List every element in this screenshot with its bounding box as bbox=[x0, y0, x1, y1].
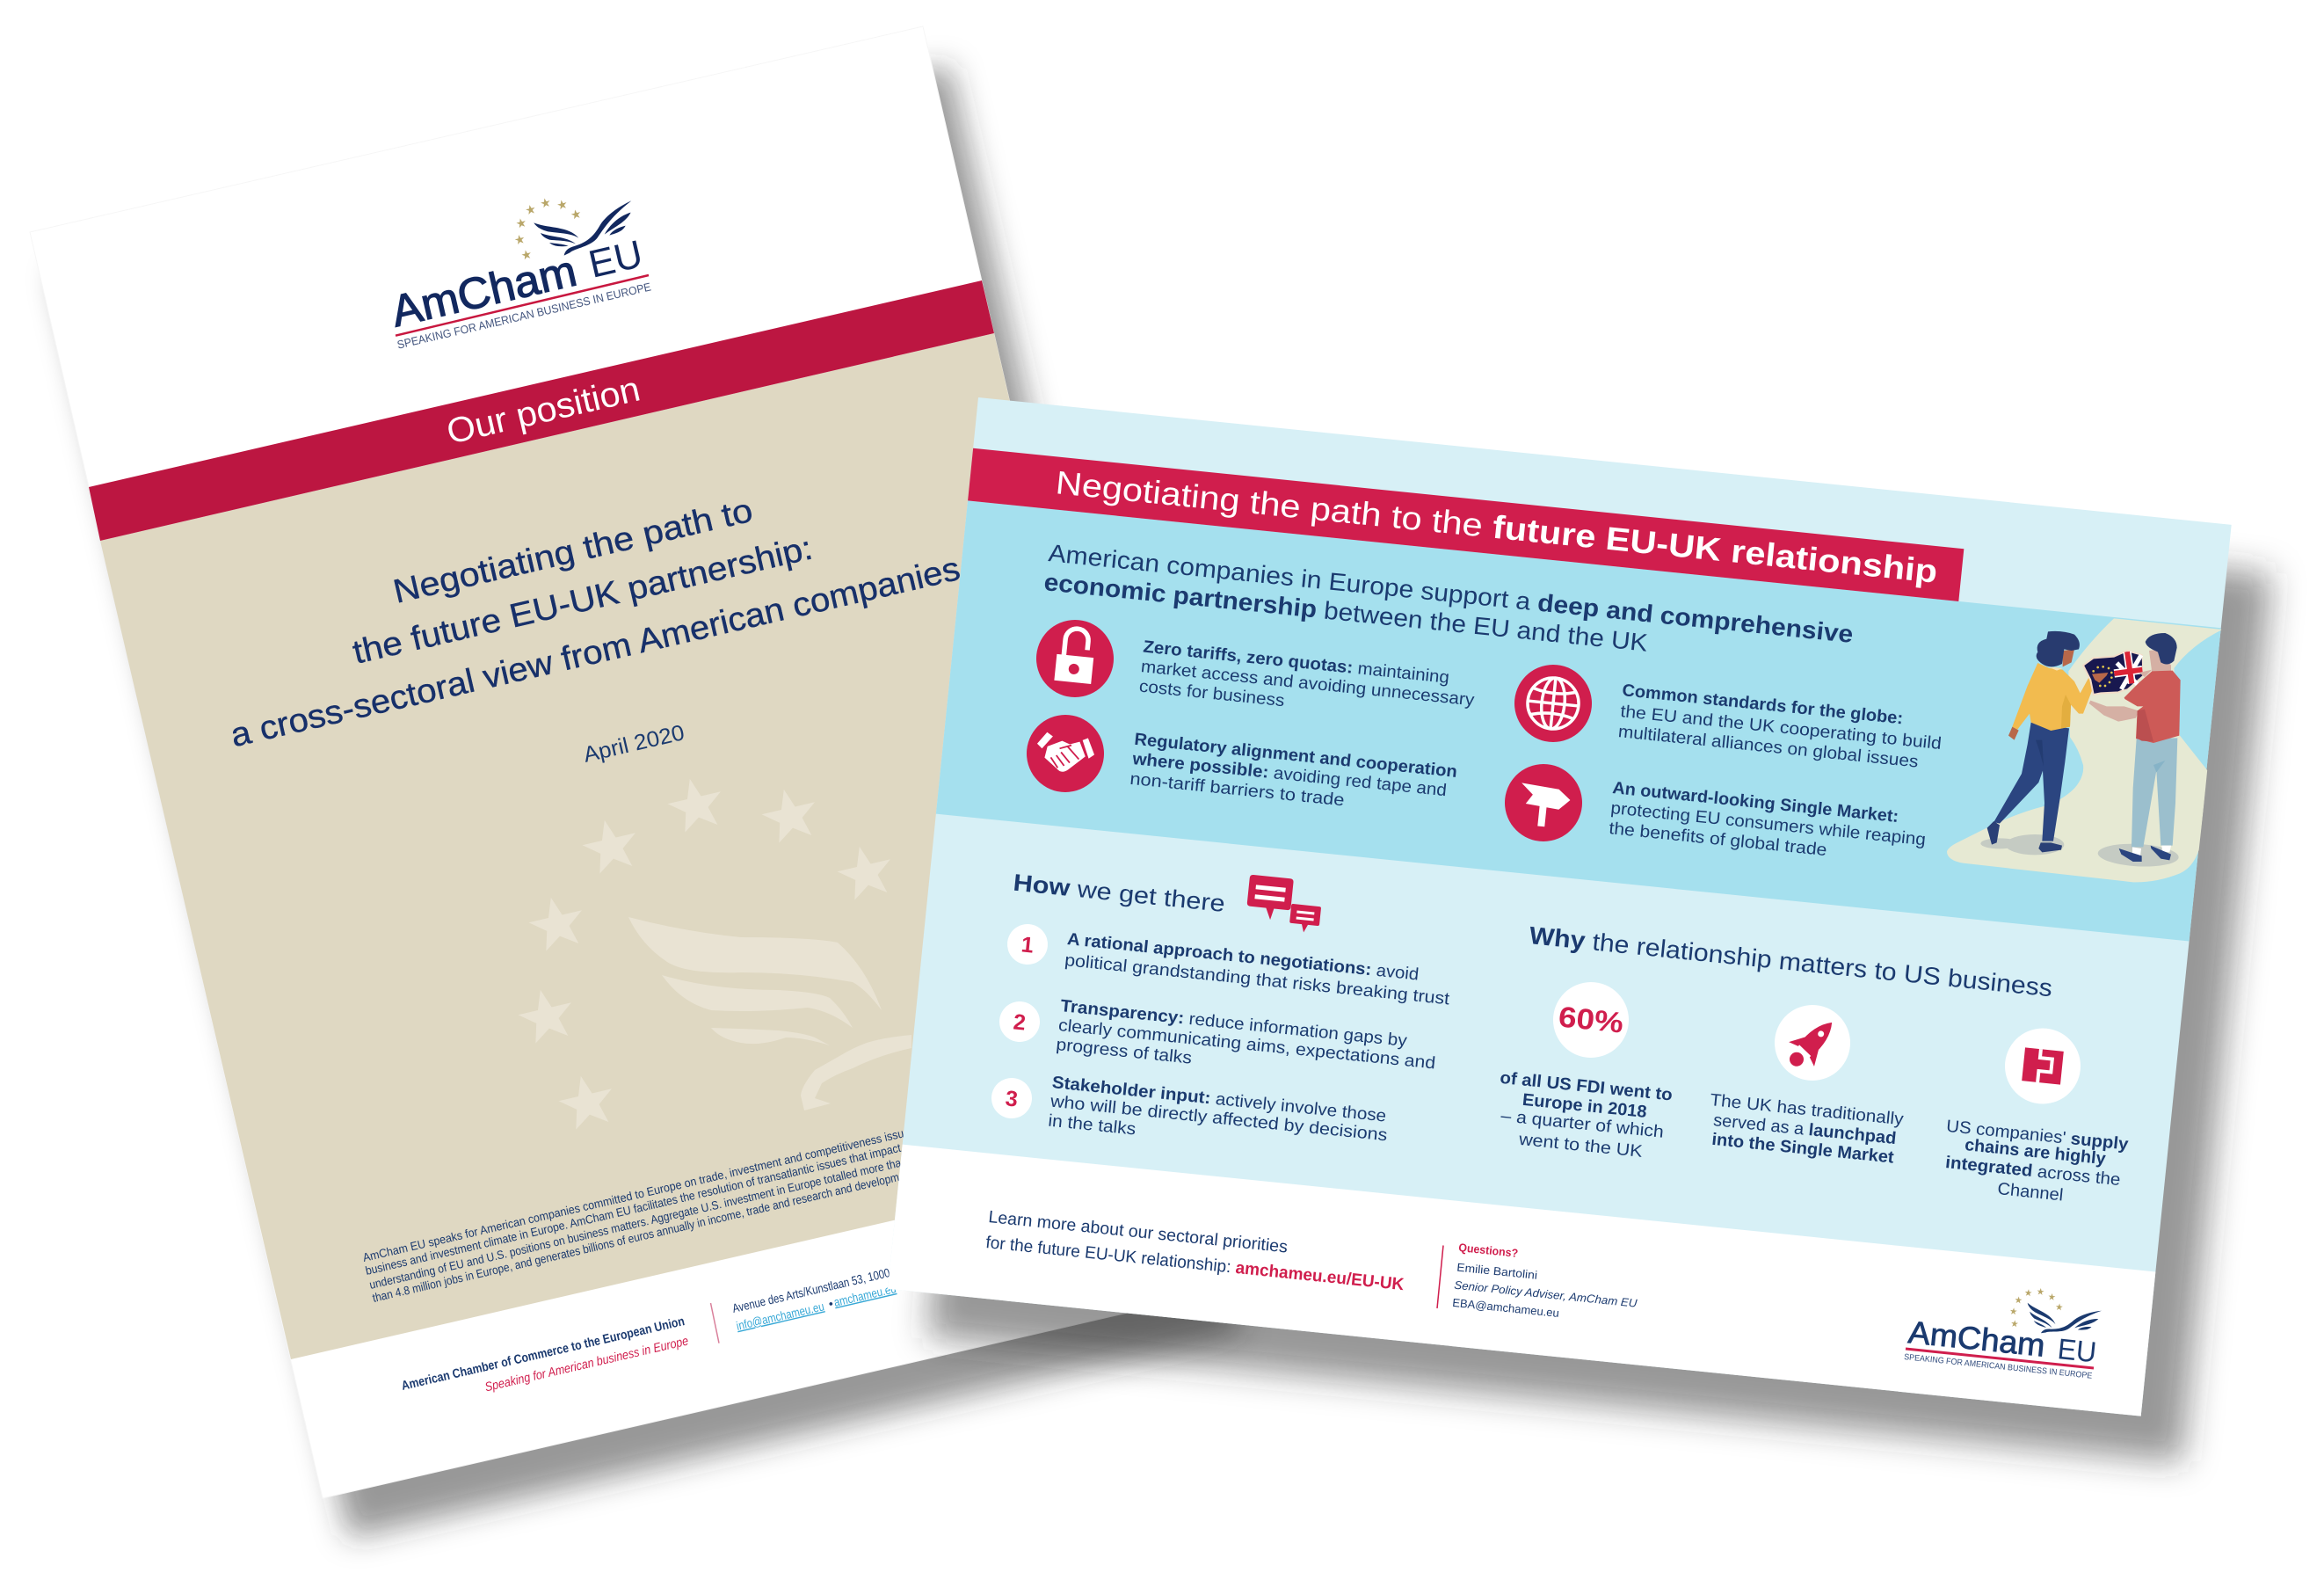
supply chain text: chains are highly bbox=[1964, 1135, 2107, 1169]
intro statement: economic partnership between the EU and the UK bbox=[1042, 568, 1649, 657]
stat text: – a quarter of which bbox=[1500, 1106, 1665, 1142]
boilerplate paragraph: AmCham EU speaks for American companies committed to Europe on trade, investment and competitiveness issues. It aims bbox=[361, 1115, 954, 1264]
boilerplate paragraph: understanding of EU and U.S. positions on business matters. Aggregate U.S. investment in Europe totalled more than bbox=[368, 1154, 908, 1292]
logo wordmark: EU bbox=[585, 232, 647, 287]
shadow of position paper bbox=[56, 66, 1242, 1538]
stat text: Europe in 2018 bbox=[1521, 1090, 1648, 1122]
icon: globe bbox=[1511, 661, 1595, 746]
benefit: zero tariffs bbox=[1138, 637, 1476, 710]
cover page sheet bbox=[30, 26, 1216, 1498]
step 3 text: Stakeholder input: actively involve those bbox=[1051, 1073, 1387, 1126]
section heading: why the relationship matters: Why the relationship matters to US business bbox=[1528, 921, 2053, 1001]
watermark: stars and eagle bbox=[514, 773, 911, 1132]
benefit: single market: the benefits of global trade bbox=[1608, 819, 1827, 860]
benefit: zero tariffs: Zero tariffs, zero quotas: maintaining bbox=[1142, 637, 1450, 688]
logo wordmark bbox=[387, 232, 647, 336]
supply chain text: Channel bbox=[1996, 1179, 2064, 1205]
boilerplate paragraph: business and investment climate in Europe. AmCham EU facilitates the resolution of transatlantic issues that impact business and bbox=[364, 1126, 967, 1278]
footer contact details: • bbox=[827, 1296, 835, 1311]
footer call to action bbox=[984, 1207, 1405, 1294]
number badge 3 bbox=[990, 1076, 1034, 1120]
icon: signpost bbox=[1501, 761, 1586, 845]
step 1 text: A rational approach to negotiations: avoid bbox=[1066, 929, 1420, 985]
footer logo wordmark: AmCham bbox=[1906, 1314, 2047, 1364]
benefit: regulatory alignment: where possible: avoiding red tape and bbox=[1130, 749, 1448, 800]
step 3 text: in the talks bbox=[1047, 1111, 1137, 1139]
panel: position paper cover bbox=[30, 26, 1216, 1498]
intro statement: American companies in Europe support a deep and comprehensive bbox=[1047, 539, 1855, 648]
footer contact details: amchameu.eu bbox=[832, 1281, 897, 1309]
footer logo wordmark: EU bbox=[2056, 1332, 2098, 1368]
stat text: went to the UK bbox=[1517, 1130, 1644, 1161]
benefit: regulatory alignment bbox=[1129, 730, 1458, 810]
red banner bbox=[89, 280, 994, 541]
benefit: zero tariffs: costs for business bbox=[1138, 677, 1286, 710]
launchpad text: into the Single Market bbox=[1710, 1130, 1895, 1168]
stat badge: 60% bbox=[1550, 979, 1632, 1061]
logo tagline: SPEAKING FOR AMERICAN BUSINESS IN EUROPE bbox=[396, 280, 652, 352]
document date: April 2020 bbox=[581, 720, 686, 768]
benefit: regulatory alignment: non-tariff barriers to trade bbox=[1129, 769, 1345, 810]
number badge 2 bbox=[998, 1000, 1042, 1044]
benefit: common standards: the EU and the UK cooperating to build bbox=[1619, 702, 1943, 754]
benefit: single market bbox=[1608, 778, 1927, 860]
boilerplate paragraph: than 4.8 million jobs in Europe, and generates billions of euros annually in income, trade and research and development bbox=[371, 1167, 915, 1305]
document title: Negotiating the path to bbox=[390, 492, 756, 611]
supply chain text: integrated across the bbox=[1944, 1153, 2121, 1190]
benefit: common standards: Common standards for the globe: bbox=[1621, 681, 1904, 728]
benefit: single market: protecting EU consumers while reaping bbox=[1609, 798, 1927, 849]
panel: infographic sheet bbox=[888, 397, 2232, 1416]
step 1 text bbox=[1064, 929, 1451, 1009]
document title: a cross-sectoral view from American companies bbox=[228, 550, 963, 754]
launchpad text: served as a launchpad bbox=[1712, 1110, 1897, 1148]
benefit: zero tariffs: market access and avoiding unnecessary bbox=[1140, 657, 1476, 710]
beige cover area bbox=[100, 333, 1183, 1359]
icon: handshake bbox=[1023, 711, 1108, 796]
sheet backgrounds bbox=[888, 397, 2232, 1416]
footer contact details bbox=[731, 1256, 931, 1333]
logo wordmark: AmCham bbox=[387, 246, 581, 336]
footer logo mark bbox=[2005, 1280, 2102, 1352]
launchpad text: The UK has traditionally bbox=[1709, 1090, 1905, 1129]
icon: rocket bbox=[1771, 1001, 1854, 1084]
supply chain text bbox=[1944, 1117, 2130, 1205]
number badge 2: 2 bbox=[1013, 1009, 1027, 1036]
launchpad text bbox=[1709, 1090, 1905, 1168]
banner heading: Our position bbox=[443, 370, 643, 452]
step 1 text: political grandstanding that risks breaking trust bbox=[1064, 950, 1451, 1009]
footer logo tagline: SPEAKING FOR AMERICAN BUSINESS IN EUROPE bbox=[1904, 1352, 2093, 1381]
number badge 1 bbox=[1006, 922, 1049, 966]
footer contact details: info@amchameu.eu bbox=[735, 1299, 825, 1333]
stat text bbox=[1499, 1068, 1674, 1161]
step 2 text bbox=[1055, 996, 1436, 1074]
icon: open padlock bbox=[1033, 616, 1117, 701]
logo mark bbox=[514, 197, 631, 260]
footer contact block: EBA@amchameu.eu bbox=[1452, 1296, 1560, 1320]
step 3 text bbox=[1047, 1073, 1389, 1145]
footer contact block: Emilie Bartolini bbox=[1456, 1261, 1538, 1282]
illustration: two people with EU and UK flags bbox=[1947, 618, 2222, 882]
step 2 text: Transparency: reduce information gaps by bbox=[1059, 996, 1408, 1051]
supply chain text: US companies' supply bbox=[1945, 1117, 2130, 1154]
footer contact block: Senior Policy Adviser, AmCham EU bbox=[1454, 1278, 1638, 1310]
number badge 3: 3 bbox=[1005, 1086, 1019, 1112]
footer organisation name: American Chamber of Commerce to the European Union bbox=[400, 1314, 686, 1394]
footer call to action: for the future EU-UK relationship: amchameu.eu/EU-UK bbox=[984, 1233, 1405, 1294]
footer call to action: Learn more about our sectoral priorities bbox=[987, 1207, 1289, 1257]
stat badge: 60%: 60% bbox=[1557, 1000, 1625, 1039]
stat text: of all US FDI went to bbox=[1499, 1068, 1674, 1105]
footer contact details: Avenue des Arts/Kunstlaan 53, 1000 Brussels bbox=[731, 1256, 931, 1315]
logo: AmCham EU footer bbox=[1904, 1280, 2102, 1381]
logo: AmCham EU cover bbox=[387, 197, 652, 352]
step 2 text: clearly communicating aims, expectations and bbox=[1057, 1016, 1436, 1074]
number badge 1: 1 bbox=[1020, 932, 1035, 958]
benefit: regulatory alignment: Regulatory alignment and cooperation bbox=[1133, 730, 1458, 782]
icon: supply chain block bbox=[2001, 1024, 2084, 1108]
section heading: how we get there: How we get there bbox=[1012, 870, 1226, 917]
step 3 text: who will be directly affected by decisions bbox=[1049, 1091, 1389, 1145]
footer organisation name: Speaking for American business in Europe bbox=[483, 1334, 690, 1394]
footer contact block: Questions? bbox=[1458, 1241, 1519, 1260]
footer contact details: • EU bbox=[897, 1274, 925, 1293]
step 2 text: progress of talks bbox=[1055, 1035, 1193, 1068]
document title: the future EU-UK partnership: bbox=[350, 529, 816, 672]
benefit: common standards: multilateral alliances on global issues bbox=[1617, 722, 1920, 772]
title banner: Negotiating the path to the future EU-UK relationship bbox=[1054, 464, 1939, 590]
logo rule bbox=[396, 275, 649, 336]
icon: speech bubbles bbox=[1246, 875, 1321, 934]
benefit: single market: An outward-looking Single Market: bbox=[1611, 778, 1899, 826]
benefit: common standards bbox=[1617, 681, 1943, 772]
shadow of infographic bbox=[927, 446, 2271, 1462]
footer contact block bbox=[1452, 1241, 1638, 1320]
footer logo wordmark bbox=[1906, 1314, 2098, 1368]
